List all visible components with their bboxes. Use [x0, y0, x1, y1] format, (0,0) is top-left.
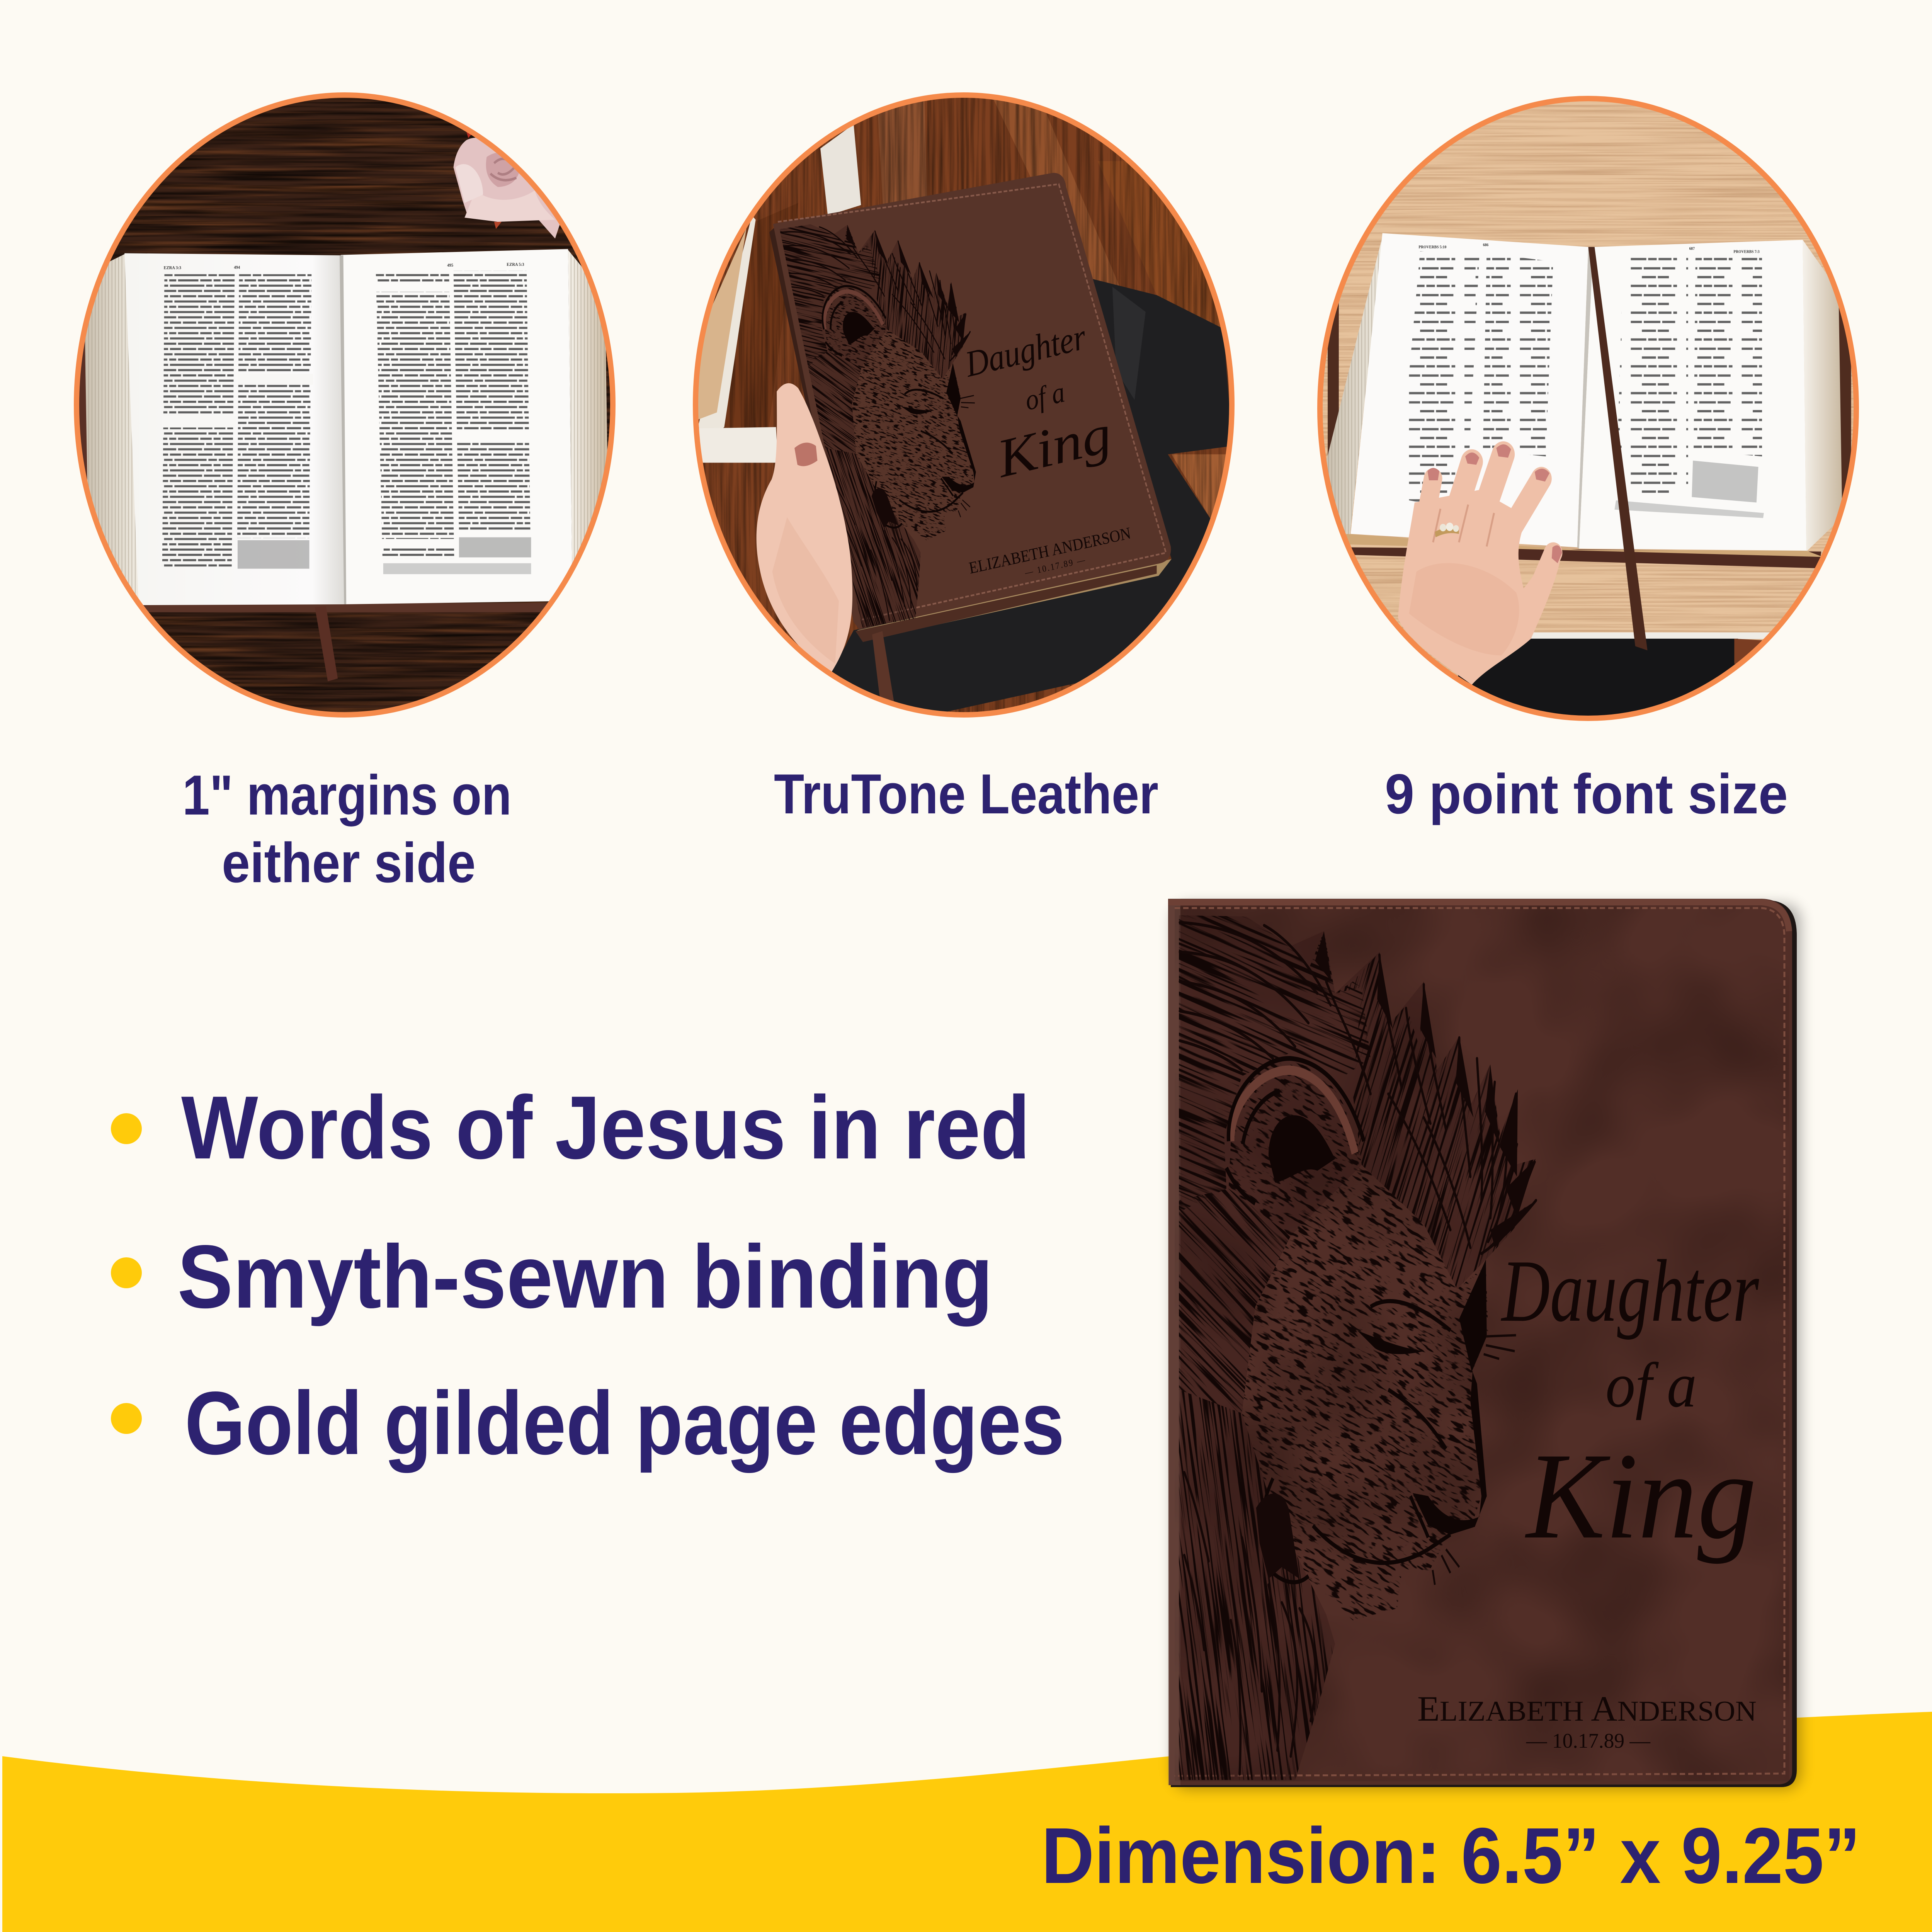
- cover date: — 10.17.89 —: [1526, 1729, 1651, 1752]
- book: [714, 133, 1172, 665]
- photo panel: hand holding lion cover Bible: [676, 77, 1256, 734]
- hand: [757, 383, 852, 672]
- page text columns: [162, 262, 531, 574]
- page text columns: PROVERBS 7:3: [1733, 250, 1760, 254]
- page text columns: 687: [1689, 247, 1695, 251]
- book: Daughter: [962, 316, 1089, 385]
- cover name: ELIZABETH ANDERSON: [1417, 1689, 1757, 1728]
- photo panel: open Bible with hand on light wood: [1294, 77, 1874, 734]
- book: — 10.17.89 —: [1024, 554, 1086, 578]
- hand: [1398, 444, 1562, 685]
- lion engraving: [1061, 790, 1660, 1838]
- caption: font size: 9 point font size: [1385, 762, 1788, 825]
- bullet: words of Jesus: Words of Jesus in red: [181, 1078, 1030, 1178]
- cover title: [1501, 1242, 1759, 1565]
- cover title: King: [1524, 1428, 1757, 1565]
- page text columns: 495: [447, 263, 453, 268]
- photo panel: open Bible on dark wood: [74, 92, 616, 718]
- bullet list: [111, 1078, 1065, 1473]
- yellow wave band: [2, 1712, 1932, 1932]
- book: of a: [1023, 376, 1067, 417]
- page text columns: PROVERBS 5:10: [1418, 245, 1446, 250]
- page text columns: 686: [1483, 243, 1488, 247]
- caption: margins: 1" margins on: [182, 764, 512, 827]
- book: King: [992, 403, 1116, 489]
- caption: margins: either side: [222, 831, 476, 894]
- page text columns: 494: [234, 265, 240, 270]
- jeans: [832, 278, 1233, 723]
- caption: margins: [182, 764, 512, 894]
- product: lion cover Bible: [1061, 790, 1801, 1838]
- bullet: binding: Smyth-sewn binding: [177, 1227, 993, 1327]
- cover title: Daughter: [1501, 1242, 1759, 1340]
- page text columns: EZRA 3:3: [164, 265, 181, 270]
- page text columns: [1398, 243, 1764, 518]
- cover title: of a: [1605, 1350, 1697, 1420]
- bullet: page edges: Gold gilded page edges: [185, 1373, 1065, 1473]
- rose: [454, 132, 561, 238]
- caption: leather: TruTone Leather: [774, 762, 1158, 825]
- page text columns: EZRA 5:3: [507, 262, 524, 267]
- dimension label: Dimension: 6.5” x 9.25”: [1041, 1811, 1861, 1900]
- ribbon: [1588, 247, 1648, 650]
- book: ELIZABETH ANDERSON: [968, 524, 1132, 577]
